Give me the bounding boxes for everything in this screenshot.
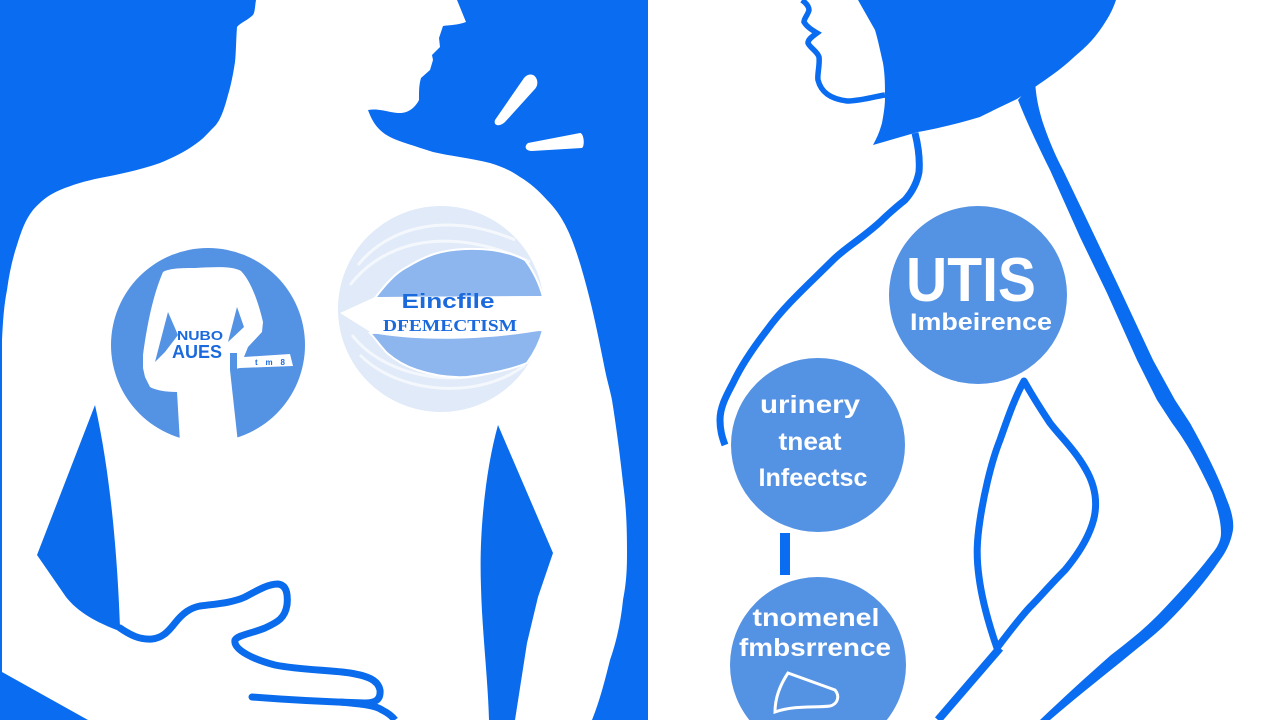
hair: [858, 0, 1116, 145]
icon: left side triangle: [37, 405, 122, 632]
white body silhouette: [2, 0, 627, 720]
face outline: [802, 0, 885, 101]
small label: tm8: [255, 358, 286, 367]
circle: hormonal imbalance: tnomenel: [752, 604, 880, 632]
head silhouette in circle: [143, 267, 293, 443]
white middle: [340, 296, 544, 339]
circle: endocrine diagram: [338, 206, 544, 412]
arm lower line: [938, 648, 1000, 720]
panel: right female figure: [720, 0, 1233, 720]
circle: UTIs: [889, 206, 1067, 384]
circle label: Eincfile: [402, 291, 494, 313]
panel: left male figure: [0, 0, 648, 720]
circle label: AUES: [172, 342, 222, 362]
circle label: [383, 291, 517, 335]
blue background: [0, 0, 648, 720]
lower arm outline: [340, 702, 395, 720]
circle: hormonal imbalance: [730, 577, 906, 720]
connector bar: [780, 533, 790, 575]
circle label: [172, 328, 223, 362]
circle label: DFEMECTISM: [383, 316, 517, 335]
neck and front torso outline: [720, 133, 919, 445]
circle label: NUBO: [177, 328, 223, 343]
blue bar in circle: [230, 353, 237, 370]
arm loop outline: [977, 381, 1096, 648]
circle: hormonal imbalance: fmbsrrence: [739, 634, 891, 662]
lower band: [370, 330, 543, 377]
circle: urinary tract infection: [731, 358, 905, 532]
circle: urinary tract infection: Infeectsc: [758, 464, 868, 492]
back outline: [1018, 80, 1233, 720]
small blue peak shapes: [155, 307, 244, 362]
circle: UTIs: UTIS: [906, 246, 1036, 315]
circle: neck diagram: [111, 248, 305, 443]
upper band: [375, 249, 543, 298]
circle: urinary tract infection: tneat: [778, 428, 842, 456]
icon: small outline: [775, 673, 838, 712]
circle: UTIs: Imbeirence: [910, 309, 1052, 336]
arm outline: [120, 584, 380, 703]
pale streaks: [350, 225, 535, 388]
icon: right side triangle: [481, 425, 553, 720]
circle: urinary tract infection: urinery: [760, 391, 860, 419]
icon: neck pain tick marks: [495, 74, 584, 151]
